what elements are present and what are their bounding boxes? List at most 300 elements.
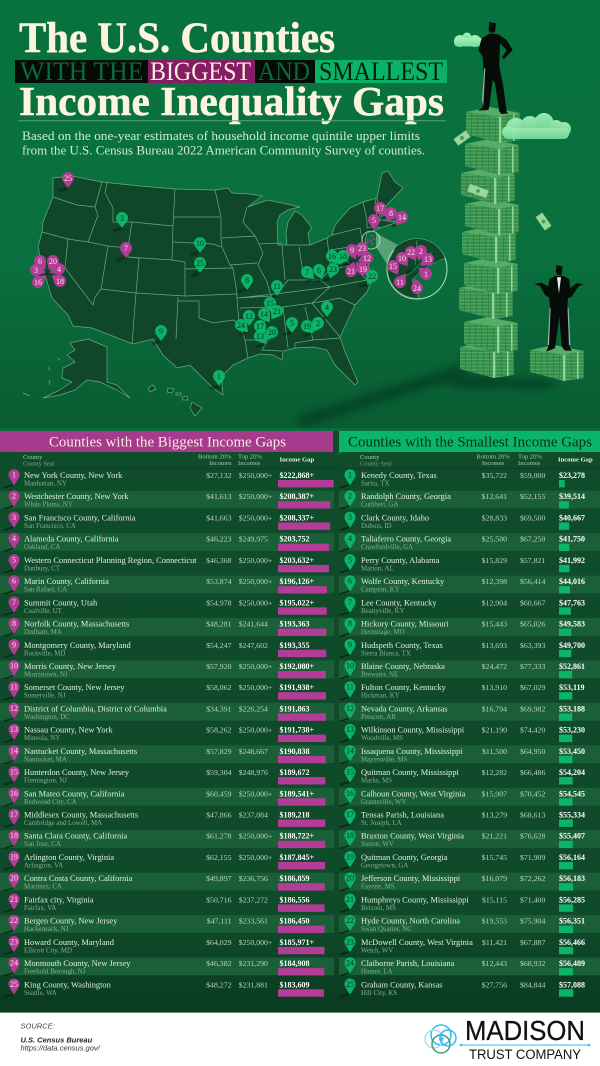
row 19: $71,909 — [520, 853, 545, 862]
subtitle — [22, 128, 425, 158]
row 1: Manhattan, NY — [24, 480, 67, 488]
row 24: Monmouth County, New Jersey — [24, 959, 131, 968]
logo: Madison Trust Company: TRUST COMPANY — [469, 1047, 581, 1062]
row 11: Hickman, KY — [361, 693, 400, 700]
row 18: San Jose, CA — [24, 841, 61, 848]
row 3: Clark County, Idaho — [361, 513, 429, 522]
row 20: $16,079 — [482, 874, 507, 883]
row 17: $189,218 — [280, 811, 310, 820]
heading: biggest — [0, 431, 334, 456]
row 10: Blaine County, Nebraska — [361, 662, 445, 671]
green pin 18 — [333, 248, 351, 268]
row 14: 14 — [346, 746, 354, 755]
row 12 — [339, 703, 600, 721]
row 15: Marks, MS — [361, 778, 392, 785]
row 9 — [340, 639, 585, 658]
row 25: $57,088 — [559, 980, 585, 989]
inset pin 11: 11 — [396, 278, 404, 287]
row 20: Fayette, MS — [361, 884, 395, 891]
row 13: $191,738+ — [280, 726, 314, 735]
row 3: $40,667 — [559, 513, 585, 522]
row 18: $76,628 — [520, 832, 545, 841]
green pin 1: 1 — [217, 372, 221, 381]
row 7 — [340, 597, 585, 615]
title line 2 highlighted — [15, 57, 447, 86]
title line 2 highlighted: AND — [258, 57, 310, 86]
row 24: $231,290 — [239, 959, 268, 968]
row 16: $70,452 — [520, 789, 545, 798]
row 21: $186,556 — [280, 895, 310, 904]
row 13 — [4, 724, 326, 742]
row 11: $58,062 — [206, 683, 232, 692]
row 17: $68,613 — [520, 811, 545, 820]
green pin 10: 10 — [196, 239, 204, 248]
heading: biggest: Counties with the Biggest Income Gaps — [49, 434, 286, 450]
inset pin 10 — [394, 250, 413, 270]
row 25: $183,609 — [280, 980, 310, 989]
row 17: 17 — [10, 810, 18, 819]
falling bill 3 — [536, 213, 551, 230]
row 11: $13,910 — [482, 683, 507, 692]
row 6: $12,398 — [482, 577, 507, 586]
row 8: $49,583 — [559, 620, 585, 629]
row 11 — [4, 681, 326, 700]
row 15: 15 — [346, 768, 354, 777]
row 1: $35,722 — [482, 471, 507, 480]
inset zoom wedge — [376, 233, 400, 266]
row 13 — [340, 724, 585, 742]
green pin 6: 6 — [317, 266, 321, 275]
inset pin 15: 15 — [389, 262, 397, 271]
pink pin 19 — [352, 258, 371, 277]
row 4: $203,752 — [280, 535, 310, 544]
row 25: Graham County, Kansas — [361, 980, 443, 989]
row 1: $250,000+ — [239, 471, 273, 480]
pink pin 3 — [29, 263, 47, 278]
row 12 — [0, 703, 334, 721]
row 13: Wilkinson County, Mississippi — [361, 726, 465, 735]
pin shadows — [39, 188, 412, 389]
row 12: $53,188 — [559, 704, 585, 713]
pink pin 20 — [44, 253, 61, 273]
row 20: 20 — [10, 874, 18, 883]
green pin 9 — [155, 325, 167, 341]
cloud behind top man — [454, 32, 484, 47]
row 22: Bergen County, New Jersey — [24, 917, 118, 926]
row 21: 21 — [346, 895, 354, 904]
Alaska — [43, 339, 130, 398]
green pin 25: 25 — [196, 259, 204, 268]
row 21: $56,285 — [559, 895, 585, 904]
row 2: $39,514 — [559, 492, 585, 501]
row 4: Alameda County, California — [24, 535, 119, 544]
row 9: $63,393 — [520, 641, 545, 650]
title line 2 highlighted: BIGGEST — [150, 57, 251, 86]
row 24: Freehold Borough, NJ — [24, 969, 86, 976]
row 14: $248,667 — [239, 747, 268, 756]
row 4: 4 — [12, 534, 16, 543]
row 23: Howard County, Maryland — [24, 938, 115, 947]
green pin 7: 7 — [305, 268, 309, 277]
pink pin 3: 3 — [34, 266, 38, 275]
row 1: New York County, New York — [24, 471, 123, 480]
green pin 4 — [321, 301, 333, 317]
row 20: $49,897 — [206, 874, 232, 883]
pink pin 7 — [120, 242, 132, 258]
row 15: Quitman County, Mississippi — [361, 768, 460, 777]
row 24 — [0, 957, 334, 976]
green pin 14: 14 — [260, 310, 268, 319]
row 12: $34,391 — [206, 704, 232, 713]
green pin 19 — [299, 318, 318, 338]
row 22: $186,450 — [280, 917, 310, 926]
row 3 — [4, 512, 330, 530]
row 5: $41,992 — [559, 556, 585, 565]
row 10: Morris County, New Jersey — [24, 662, 117, 671]
row 23: $56,466 — [559, 938, 585, 947]
title — [15, 15, 447, 124]
row 10: $250,000+ — [239, 662, 273, 671]
row 3: 3 — [348, 513, 352, 522]
row 12: Washington, DC — [24, 714, 70, 721]
row 23: Welch, WV — [361, 947, 393, 954]
row 16: $15,907 — [482, 789, 507, 798]
inset pin 2: 2 — [419, 247, 423, 256]
row 13: $250,000+ — [239, 726, 273, 735]
row 3: $250,000+ — [239, 513, 273, 522]
column headers: smallest: Top 20% — [518, 454, 542, 460]
row 1: $23,278 — [559, 471, 585, 480]
pink pin 12: 12 — [363, 254, 371, 263]
pink pin 14: 14 — [398, 213, 406, 222]
row 1: 1 — [12, 470, 16, 480]
row 13: Nassau County, New York — [24, 726, 113, 735]
row 15: $59,304 — [206, 768, 232, 777]
row 7: 7 — [348, 598, 352, 607]
row 13: Woodville, MS — [361, 735, 403, 742]
row 18: 18 — [346, 831, 354, 840]
row 8: $65,026 — [520, 620, 545, 629]
row 18: Braxton County, West Virginia — [361, 832, 464, 841]
row 22: 22 — [346, 916, 354, 925]
green pin 7 — [299, 264, 318, 283]
row 22 — [0, 915, 334, 933]
row 24: $46,382 — [206, 959, 232, 968]
row 14: Nantucket County, Massachusetts — [24, 747, 137, 756]
column headers: biggest: Income Gap — [280, 456, 314, 464]
column headers: biggest: County — [23, 454, 43, 461]
row 19: Arlington County, Virginia — [24, 853, 114, 862]
row 4: $46,223 — [206, 535, 232, 544]
row 6 — [339, 575, 600, 594]
logo wordmark: MADISON — [465, 1015, 585, 1046]
row 25: Hill City, KS — [361, 990, 397, 997]
row 16 — [339, 788, 600, 806]
footer background — [0, 1013, 600, 1066]
subtitle: Based on the one-year estimates of household income quintile upper limits — [22, 128, 420, 143]
pink pin 20: 20 — [49, 257, 57, 266]
row 6: Campton, KY — [361, 587, 400, 594]
pink pin 18 — [48, 270, 68, 289]
row 1 — [340, 469, 585, 488]
row 24: $184,908 — [280, 959, 310, 968]
green pin 11: 11 — [273, 282, 281, 291]
row 12: Nevada County, Arkansas — [361, 704, 448, 713]
row 20: 20 — [346, 874, 354, 883]
source: SOURCE: — [20, 1022, 55, 1030]
row 5: $46,368 — [206, 556, 232, 565]
cloud over stack — [502, 113, 571, 139]
row 22: $56,351 — [559, 917, 585, 926]
green pin 23: 23 — [329, 265, 337, 274]
row 2: Randolph County, Georgia — [361, 492, 451, 501]
row 16: 16 — [346, 789, 354, 798]
pink pin 23: 23 — [358, 244, 366, 253]
row 9: $49,700 — [559, 641, 585, 650]
row 5: $250,000+ — [239, 556, 273, 565]
row 18 — [0, 830, 334, 849]
row 20: $186,859 — [280, 874, 310, 883]
green pin 18: 18 — [339, 252, 347, 261]
row 4: Taliaferro County, Georgia — [361, 535, 451, 544]
row 16: $250,000+ — [239, 789, 273, 798]
row 16: San Mateo County, California — [24, 789, 125, 798]
green pin 12 — [243, 310, 255, 326]
green pin 4: 4 — [325, 303, 329, 312]
row 20: $56,183 — [559, 874, 585, 883]
row 22: Hyde County, North Carolina — [361, 917, 460, 926]
row 14: Mayersville, MS — [361, 756, 407, 763]
inset pin 13: 13 — [424, 255, 432, 264]
row 23 — [4, 936, 324, 955]
row 22: $75,904 — [520, 917, 545, 926]
row 3: Dubois, ID — [361, 523, 392, 530]
row 1: $27,132 — [206, 471, 232, 480]
inset pin 15 — [385, 258, 403, 278]
row 25: Seattle, WA — [24, 990, 57, 997]
row 14: $57,829 — [206, 747, 232, 756]
row 13: 13 — [346, 725, 354, 734]
green pin 17: 17 — [256, 322, 264, 331]
illustration: money towers and businessmen — [454, 22, 584, 381]
row 2: $208,387+ — [280, 492, 314, 501]
row 6: 6 — [348, 577, 352, 586]
row 17: $237,084 — [239, 811, 268, 820]
row 22: $19,553 — [482, 917, 507, 926]
row 4: Crawfordville, GA — [361, 544, 413, 551]
row 4 — [339, 533, 600, 551]
row 23: $250,000+ — [239, 938, 273, 947]
row 2 — [339, 490, 600, 509]
green pin 22 — [362, 268, 380, 288]
short money stack — [530, 345, 584, 381]
row 3: San Francisco County, California — [24, 513, 136, 522]
row 15: Hunterdon County, New Jersey — [24, 768, 130, 777]
row 15 — [4, 766, 325, 785]
row 18: $21,221 — [482, 832, 507, 841]
row 25: 25 — [10, 980, 18, 989]
pink pin 5: 5 — [372, 216, 376, 225]
row 15: $66,486 — [520, 768, 545, 777]
row 8: Dedham, MA — [24, 629, 62, 636]
row 17: Cambridge and Lowell, MA — [24, 820, 102, 827]
row 5: Danbury, CT — [24, 565, 61, 572]
row 7: $12,904 — [482, 598, 507, 607]
row 20: Jefferson County, Mississippi — [361, 874, 461, 883]
row 17 — [4, 809, 325, 827]
pink pin 23 — [352, 240, 370, 260]
row 4: $249,975 — [239, 535, 268, 544]
pink pin 25: 25 — [64, 174, 72, 183]
row 9: Rockville, MD — [24, 650, 65, 657]
green pin 8 — [241, 274, 253, 290]
row 8: Norfolk County, Massachusetts — [24, 620, 129, 629]
row 2: $52,155 — [520, 492, 545, 501]
background — [0, 0, 600, 430]
row 21: Fairfax, VA — [24, 905, 56, 912]
green pin 15: 15 — [266, 299, 274, 308]
logo mark — [425, 1025, 456, 1053]
row 17: St. Joseph, LA — [361, 820, 402, 827]
row 21: $237,272 — [239, 895, 268, 904]
column headers: biggest: Bottom 20% — [198, 454, 232, 460]
row 2: Westchester County, New York — [24, 492, 129, 501]
pink pin 5 — [368, 214, 380, 230]
row 15: $54,204 — [559, 768, 585, 777]
row 22: $47,111 — [207, 917, 232, 926]
Hawaii — [23, 358, 202, 416]
row 9: $193,355 — [280, 641, 310, 650]
row 14: $53,450 — [559, 747, 585, 756]
row 10 — [0, 660, 334, 679]
green pin 12: 12 — [245, 312, 253, 321]
row 6 — [0, 575, 334, 594]
row 5 — [340, 554, 585, 573]
row 5: $57,821 — [520, 556, 545, 565]
pink pin 7: 7 — [124, 244, 128, 253]
row 25: 25 — [346, 980, 354, 989]
row 17: $55,334 — [559, 811, 585, 820]
row 16: Grantsville, WV — [361, 799, 406, 806]
row 19: Quitman County, Georgia — [361, 853, 448, 862]
column headers: smallest: Bottom 20% — [476, 454, 510, 460]
green pin 2: 2 — [316, 319, 320, 328]
row 1: 1 — [348, 470, 352, 480]
row 1: $222,868+ — [280, 471, 314, 480]
row 21: Fairfax city, Virginia — [24, 895, 94, 904]
row 7: Beattyville, KY — [361, 608, 405, 615]
panel: smallest income gaps — [338, 431, 600, 997]
row 23: $67,887 — [520, 938, 545, 947]
row 12: $16,794 — [482, 704, 507, 713]
row 13: $21,190 — [482, 726, 507, 735]
row 10 — [339, 660, 600, 679]
inset pin 2 — [413, 244, 428, 262]
row 3: $41,663 — [206, 513, 232, 522]
column headers: biggest: Top 20% — [238, 454, 262, 460]
row 17: 17 — [346, 810, 354, 819]
green pin 3 — [116, 212, 128, 228]
row 2: 2 — [348, 492, 352, 501]
row 20: $236,756 — [239, 874, 268, 883]
row 7: $195,022+ — [280, 598, 314, 607]
pink pin 19: 19 — [359, 265, 367, 274]
row 20: Contra Costa County, California — [24, 874, 133, 883]
pink pin 16: 16 — [34, 278, 42, 287]
row 15: 15 — [10, 768, 18, 777]
row 18: $188,722+ — [280, 832, 314, 841]
row 16: $189,541+ — [280, 789, 314, 798]
row 13: $53,230 — [559, 726, 585, 735]
row 11: $250,000+ — [239, 683, 273, 692]
row 18: 18 — [10, 831, 18, 840]
row 13: $74,420 — [520, 726, 545, 735]
row 8: Hickory County, Missouri — [361, 620, 449, 629]
row 9: 9 — [348, 640, 352, 649]
column headers: smallest — [339, 454, 600, 468]
row 23: $64,029 — [206, 938, 232, 947]
green pin 6 — [311, 262, 328, 281]
row 21: Belzoni, MS — [361, 905, 396, 912]
row 22: Hackensack, NJ — [24, 926, 69, 933]
row 20: Martinez, CA — [24, 884, 62, 891]
inset circle — [387, 239, 447, 299]
row 7 — [4, 597, 327, 615]
row 22: Swan Quarter, NC — [361, 926, 412, 933]
row 11: $191,938+ — [280, 683, 314, 692]
green pin 23 — [324, 261, 341, 280]
row 7: Summit County, Utah — [24, 598, 98, 607]
row 19 — [340, 851, 585, 870]
row 9: Montgomery County, Maryland — [24, 641, 132, 650]
row 20 — [339, 872, 600, 891]
row 9: $54,247 — [206, 641, 232, 650]
row 12: Prescott, AR — [361, 714, 396, 721]
rich businessman silhouette — [478, 22, 513, 114]
row 25 — [340, 978, 585, 997]
row 18: $250,000+ — [239, 832, 273, 841]
pink pin 25 — [62, 172, 74, 188]
pink pin 6: 6 — [38, 257, 42, 266]
inset pin 13 — [417, 251, 436, 270]
row 17: Tensas Parish, Louisiana — [361, 811, 444, 820]
column headers: biggest: Incomes — [209, 460, 232, 467]
row 8 — [339, 618, 600, 636]
falling bill 2 — [467, 184, 489, 198]
row 9 — [4, 639, 326, 658]
row 6: $53,874 — [206, 577, 232, 586]
row 11: Somerset County, New Jersey — [24, 683, 125, 692]
row 14: $11,500 — [482, 747, 507, 756]
row 19: $250,000+ — [239, 853, 273, 862]
row 14: 14 — [10, 746, 18, 755]
row 25: $231,881 — [239, 980, 268, 989]
row 8: $15,443 — [482, 620, 507, 629]
green pin 24: 24 — [237, 321, 245, 330]
green pin 8: 8 — [245, 276, 249, 285]
row 21: $71,400 — [520, 895, 545, 904]
green pin 21 — [266, 303, 285, 323]
inset pin 1: 1 — [424, 270, 428, 279]
row 3 — [340, 512, 585, 530]
row 22 — [339, 915, 600, 933]
heading: smallest: Counties with the Smallest Income Gaps — [348, 434, 592, 450]
row 18 — [339, 830, 600, 849]
row 11 — [340, 681, 585, 700]
pink pin 17 — [372, 200, 391, 220]
source: U.S. Census Bureau — [20, 1036, 93, 1044]
green pin 5 — [286, 317, 298, 333]
